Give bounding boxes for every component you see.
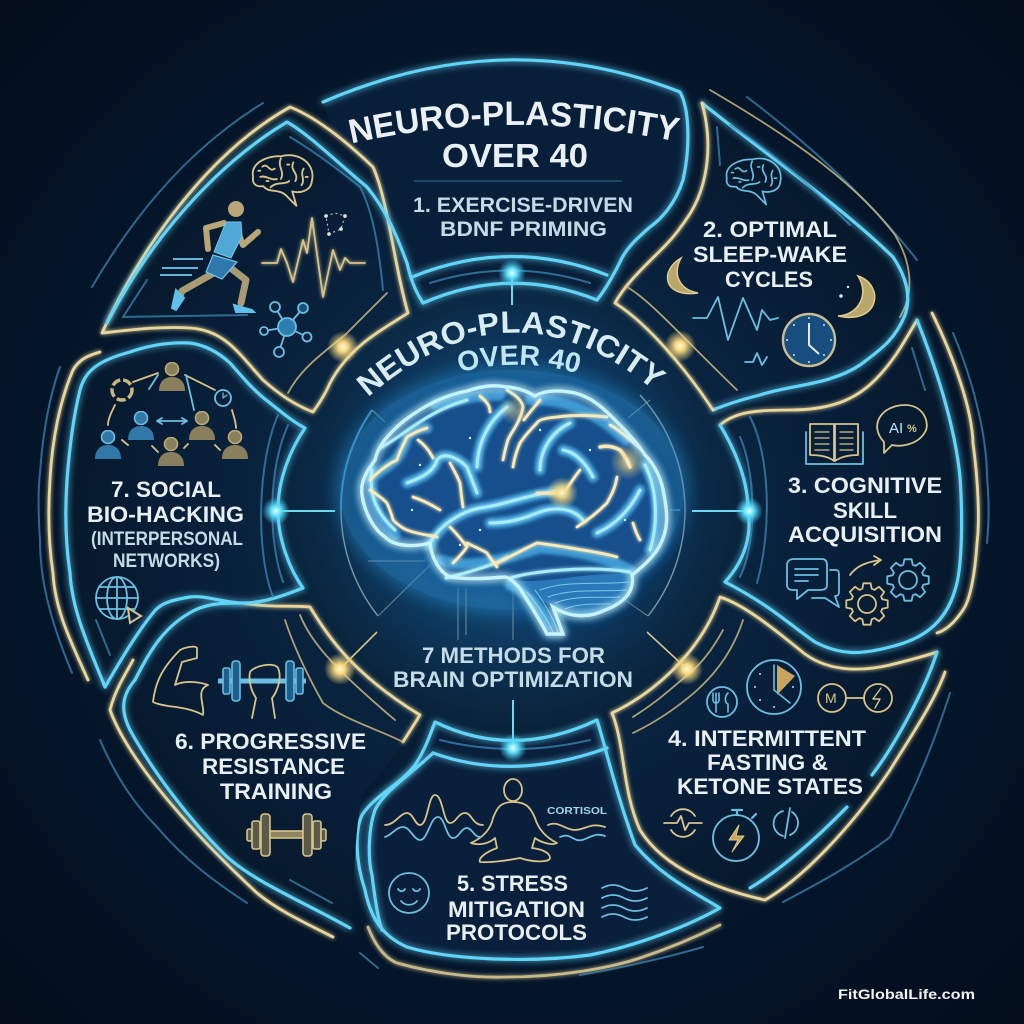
panel: 3 cognitive skill acquisition <box>692 313 989 652</box>
icon: AI speech bubble <box>877 405 927 453</box>
icon: stopwatch <box>713 810 759 861</box>
icon: AI speech bubble: AI <box>889 420 903 437</box>
panel: 1 exercise-driven BDNF priming <box>323 60 688 305</box>
icon: smiley <box>389 873 429 913</box>
icon: cortisol waves <box>548 824 605 840</box>
text: panel 7 label <box>87 477 244 572</box>
watermark: FitGlobalLife.com <box>838 986 975 1002</box>
connector node: right <box>692 497 763 525</box>
main title: NEURO-PLASTICITY <box>348 102 681 143</box>
icon: pulse ring <box>664 809 702 837</box>
text: panel 4 label: KETONE STATES <box>677 774 863 799</box>
text: panel 1 label: BDNF PRIMING <box>440 217 607 241</box>
panel: 6 progressive resistance training <box>100 603 420 937</box>
brain silhouette <box>362 386 667 634</box>
icon: metabolism to energy: M <box>825 690 837 706</box>
icon: molecule <box>260 302 312 357</box>
icon: metabolism to energy <box>818 684 892 712</box>
icon: blue dumbbell with fist <box>218 661 306 718</box>
centre guide rings <box>341 395 685 640</box>
icon: ECG pulse <box>262 218 365 297</box>
centre title: NEURO-PLASTICITY <box>356 312 667 396</box>
icon: globe with cursor <box>96 577 141 623</box>
icon: meditating figure <box>471 779 557 862</box>
text: panel 3 label: SKILL <box>833 498 897 523</box>
text: panel 5 label <box>446 871 587 945</box>
text: panel 2 label: SLEEP-WAKE <box>693 242 847 267</box>
main title: OVER 40 <box>442 137 588 174</box>
text: panel 7 label: (INTERPERSONAL <box>91 529 243 550</box>
text: panel 5 label: PROTOCOLS <box>446 920 587 945</box>
text: panel 1 label <box>413 193 633 241</box>
main title <box>348 102 681 174</box>
centre title: OVER 40 <box>458 345 580 372</box>
text: panel 2 label: 2. OPTIMAL <box>703 217 837 242</box>
icon: gold brain <box>252 154 314 207</box>
text: panel 6 label: TRAINING <box>220 779 332 804</box>
centre disc <box>271 268 755 752</box>
icon: arrow <box>850 556 881 575</box>
text: panel 2 label <box>693 217 847 292</box>
text: panel 5 label: 5. STRESS <box>457 871 568 896</box>
icon: clock <box>783 314 835 366</box>
brain cerebellum <box>515 574 633 632</box>
icon: calm waves <box>602 885 647 920</box>
connector node: upper right <box>664 330 696 362</box>
icon: gold gear <box>846 583 888 625</box>
icon: chat bubbles <box>787 559 839 607</box>
brain gold veins <box>370 390 640 567</box>
icon: runner <box>160 201 258 312</box>
text: panel 5 label: MITIGATION <box>448 897 585 922</box>
icon: crescent moon right <box>838 276 875 317</box>
text: panel 7 label: BIO-HACKING <box>87 502 244 527</box>
text: panel 6 label: RESISTANCE <box>202 754 345 779</box>
text: panel 1 label: 1. EXERCISE-DRIVEN <box>413 193 633 217</box>
text: panel 7 label: NETWORKS) <box>113 551 220 572</box>
icon: crescent moon left <box>668 258 698 294</box>
centre subtitle: BRAIN OPTIMIZATION <box>393 667 633 692</box>
text: panel 3 label: ACQUISITION <box>788 522 942 547</box>
text: panel 4 label <box>668 726 866 799</box>
text: panel 4 label: FASTING & <box>707 750 828 775</box>
text: panel 4 label: 4. INTERMITTENT <box>668 726 866 751</box>
text: panel 6 label <box>175 729 366 804</box>
text: panel 3 label: 3. COGNITIVE <box>788 473 942 498</box>
centre subtitle: 7 METHODS FOR <box>422 643 605 668</box>
panel: running man icons <box>92 103 423 412</box>
icon: flexed arm <box>153 647 208 715</box>
connector node: top <box>498 259 526 305</box>
panel: 5 stress mitigation protocols <box>357 700 720 977</box>
brain gyri tubes <box>370 395 657 625</box>
text: panel 6 label: 6. PROGRESSIVE <box>175 729 366 754</box>
connector node: lower left <box>324 653 356 685</box>
icon: blue brain <box>726 158 782 206</box>
icon: meal timing clock <box>747 660 801 714</box>
brain sparks <box>411 429 626 546</box>
icon: brainwaves <box>385 795 483 840</box>
text: cortisol: CORTISOL <box>547 805 608 817</box>
icon: gold dumbbell <box>247 814 326 856</box>
connector node: lower right <box>671 653 703 685</box>
panel: 7 social bio-hacking <box>38 343 335 687</box>
panel: 4 intermittent fasting and ketone states <box>612 597 950 902</box>
text: panel 2 label: CYCLES <box>725 267 813 292</box>
connector node: bottom <box>499 700 527 762</box>
icon: stars <box>839 286 849 298</box>
icon: cycle <box>774 808 798 838</box>
icon: blue gear <box>887 559 929 601</box>
central brain <box>340 370 684 634</box>
icon: sleep wave <box>693 297 778 340</box>
brain outline <box>362 386 667 634</box>
connector node: upper left <box>327 331 359 363</box>
brain cyan folds <box>371 400 655 578</box>
text: panel 3 label <box>788 473 942 547</box>
icon: fork and knife <box>707 687 737 717</box>
icon: open book <box>806 424 863 464</box>
panel: 2 optimal sleep-wake cycles <box>615 90 917 410</box>
icon: social network <box>95 362 248 466</box>
icon: dots constellation <box>325 213 346 235</box>
icon: AI speech bubble: % <box>907 423 917 435</box>
centre subtitle <box>393 643 633 692</box>
text: panel 7 label: 7. SOCIAL <box>111 477 221 502</box>
connector node: left <box>262 497 335 525</box>
